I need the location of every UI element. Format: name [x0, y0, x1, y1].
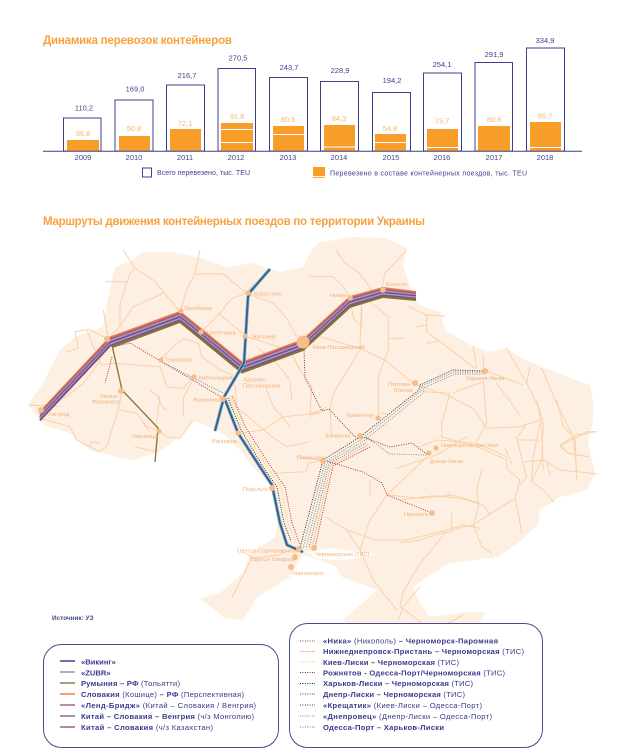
map: land — [28, 237, 595, 650]
map: station labels: Черноморская (ТИС) — [315, 552, 370, 558]
legend: dotted routes — [290, 624, 542, 748]
legend: train routes: Китай – Словакия (ч/з Казахстан) — [81, 723, 213, 732]
bar chart: 2013 — [280, 153, 296, 162]
legend: train routes: «Ленд-Бридж» (Китай – Словакия / Венгрия) — [81, 701, 256, 710]
legend: dotted routes: «Крещатик» (Киев-Лиски – Одесса-Порт) — [323, 701, 482, 710]
legend: train routes — [44, 644, 278, 748]
chart legend: Перевезено в составе контейнерных поездов, тыс. TEU — [330, 170, 527, 178]
bar chart: 73,7 — [435, 116, 449, 126]
bar chart: 243,7 — [280, 63, 298, 72]
map: station labels: Одесса-Товарная — [250, 557, 296, 563]
map: station labels: Подольск — [243, 487, 268, 493]
bar chart: 95,7 — [538, 112, 552, 120]
bar chart: 2009 — [75, 153, 91, 162]
map: station labels: Житомир — [252, 334, 276, 340]
map: station labels: Кременчуг — [347, 413, 374, 419]
map: station labels: Ивано- — [101, 394, 119, 400]
legend: train routes: Словакия (Кошице) – РФ (Перспективная) — [81, 690, 244, 699]
map: stations — [38, 287, 488, 570]
legend: dotted routes: Одесса-Порт – Харьков-Лиски — [323, 723, 444, 732]
map: station labels: Южная — [394, 388, 413, 394]
bar chart: 2010 — [126, 153, 142, 162]
map: dotted container routes — [105, 343, 485, 548]
bar chart: 2011 — [177, 153, 193, 162]
legend: dotted routes: Днепр-Лиски – Черноморская (ТИС) — [323, 690, 465, 699]
map: station labels: Шепетовка — [207, 330, 236, 336]
map of Ukraine — [28, 237, 597, 650]
bar chart: 228,9 — [331, 66, 349, 75]
bar chart: 2016 — [434, 153, 450, 162]
map: station labels: Пассажирский — [243, 382, 280, 390]
map: station labels: Нежин — [330, 293, 347, 299]
bar chart: 80,5 — [281, 115, 295, 124]
map: station labels: Жмеринка — [193, 398, 221, 404]
title: routes: Маршруты движения контейнерных поездов по территории Украины — [43, 216, 425, 228]
bar chart: 2012 — [228, 153, 244, 162]
map: station labels: Тернополь — [165, 358, 193, 364]
legend: train routes: Китай – Словакия – Венгрия (ч/з Монголию) — [81, 712, 254, 721]
legend: dotted routes: Нижнеднепровск-Пристань – Черноморская (ТИС) — [323, 647, 524, 656]
bar chart: 91,8 — [230, 112, 244, 121]
map: station labels: Ужгород — [48, 412, 70, 418]
bar chart: 54,8 — [383, 124, 397, 133]
bar chart: 80,8 — [487, 115, 501, 124]
map: station labels: Киев-Пассажирский — [313, 344, 365, 351]
chart legend — [142, 167, 527, 178]
legend: dotted routes: Харьков-Лиски – Черноморская (ТИС) — [323, 679, 473, 688]
map: station labels: Коростень — [254, 292, 281, 298]
map: station labels: Вапнярка — [212, 439, 238, 445]
map: station labels: Черноморск — [292, 571, 324, 577]
bar chart: 2018 — [537, 153, 553, 162]
map: station labels: Днепр-Лиски — [430, 459, 463, 465]
legend: train routes: «Викинг» — [81, 658, 116, 666]
map: station labels: Нижнеднепровск-Узел — [441, 443, 499, 449]
map: station labels: Харьков-Лиски — [466, 376, 504, 382]
map: station labels: Казатин- — [244, 378, 267, 384]
bar chart: 216,7 — [178, 71, 196, 80]
map: Viking route — [215, 269, 303, 552]
bar chart: 84,3 — [332, 114, 346, 123]
map: station labels: Одесса-Сортировочная — [237, 548, 298, 554]
bar chart: 50,8 — [127, 124, 141, 133]
map: station labels: Хмельницкий — [198, 374, 233, 382]
map: station labels: Помошная — [297, 456, 325, 462]
map: Olive route Romania – RF — [112, 345, 158, 462]
bar chart: 291,9 — [485, 50, 503, 59]
bar chart: 254,1 — [433, 60, 451, 69]
bar chart: 2014 — [331, 153, 347, 162]
map: station labels: Конотоп — [386, 282, 407, 288]
bar chart: 2015 — [383, 153, 399, 162]
map: station labels: Здолбунов — [184, 306, 212, 312]
map: station labels: Франковск — [92, 400, 120, 406]
title: container dynamics: Динамика перевозок контейнеров — [43, 35, 232, 47]
chart legend: Всего перевезено, тыс. TEU — [157, 170, 250, 177]
map: station labels: Полтава- — [388, 382, 412, 388]
map: station labels: Знаменка — [325, 434, 351, 440]
bar chart: 36,8 — [76, 129, 90, 138]
source note: Источник: УЗ — [52, 615, 94, 622]
bar chart: 270,5 — [229, 54, 247, 62]
bar chart: 72,1 — [178, 119, 192, 128]
map: railway network — [30, 250, 597, 640]
bar chart: 110,2 — [75, 104, 93, 112]
map: station labels: Никополь — [404, 512, 429, 518]
bar chart: 169,0 — [126, 84, 144, 94]
legend: dotted routes: «Днепровец» (Днепр-Лиски – Одесса-Порт) — [323, 712, 492, 721]
legend: train routes: Румыния – РФ (Тольятти) — [81, 679, 180, 688]
bar chart — [43, 36, 582, 162]
map: station labels: Черновцы — [132, 434, 158, 440]
map: station labels — [48, 282, 504, 577]
legend: dotted routes: «Ника» (Никополь) – Черноморск-Паромная — [323, 636, 498, 646]
legend: dotted routes: Киев-Лиски – Черноморская (ТИС) — [323, 658, 459, 667]
bar chart: 194,2 — [383, 76, 401, 85]
bar chart: 2017 — [486, 153, 502, 162]
legend: train routes: «ZUBR» — [81, 668, 111, 678]
map: trunk multi-route band — [40, 288, 416, 420]
legend: dotted routes: Рожнятов - Одесса-Порт/Черноморская (ТИС) — [323, 668, 505, 678]
bar chart: 334,9 — [536, 36, 554, 45]
